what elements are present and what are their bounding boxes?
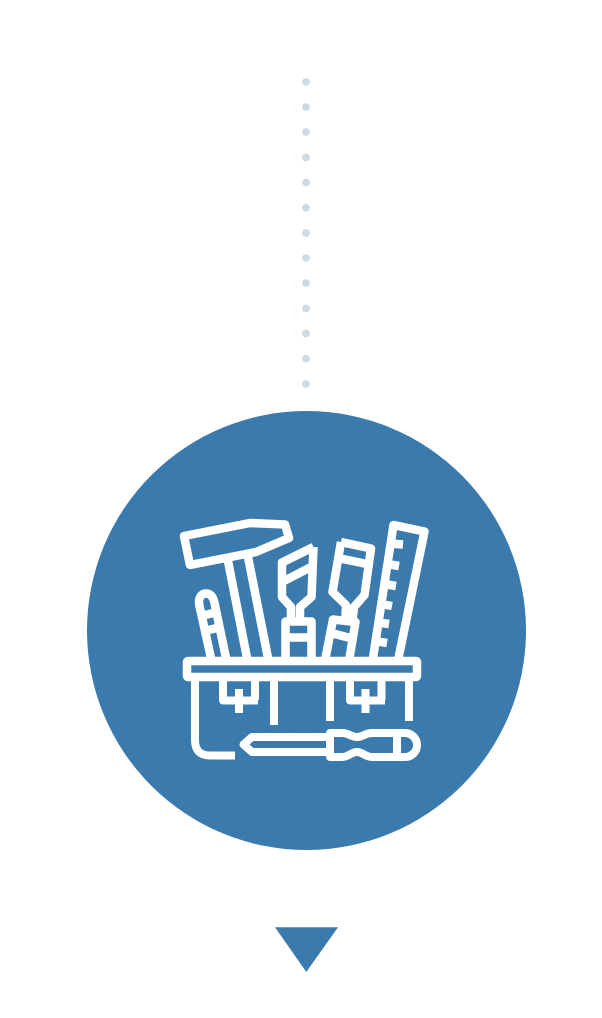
- icon: hammer: [184, 523, 289, 658]
- icon: wide chisel: [326, 542, 371, 658]
- dotted connector line: [302, 78, 310, 388]
- icon: left latch: [223, 680, 258, 713]
- icon: ruler: [373, 525, 424, 658]
- icon: chisel: [282, 547, 314, 658]
- icon: screwdriver: [244, 733, 417, 757]
- icon: toolbox with tools: [184, 523, 424, 757]
- blue circle badge: [87, 411, 526, 850]
- icon: toolbox lid: [187, 661, 417, 677]
- icon: pencil: [199, 594, 226, 658]
- icon: toolbox body: [195, 680, 409, 756]
- icon: right latch: [350, 680, 385, 713]
- arrow: down triangle: [275, 927, 338, 972]
